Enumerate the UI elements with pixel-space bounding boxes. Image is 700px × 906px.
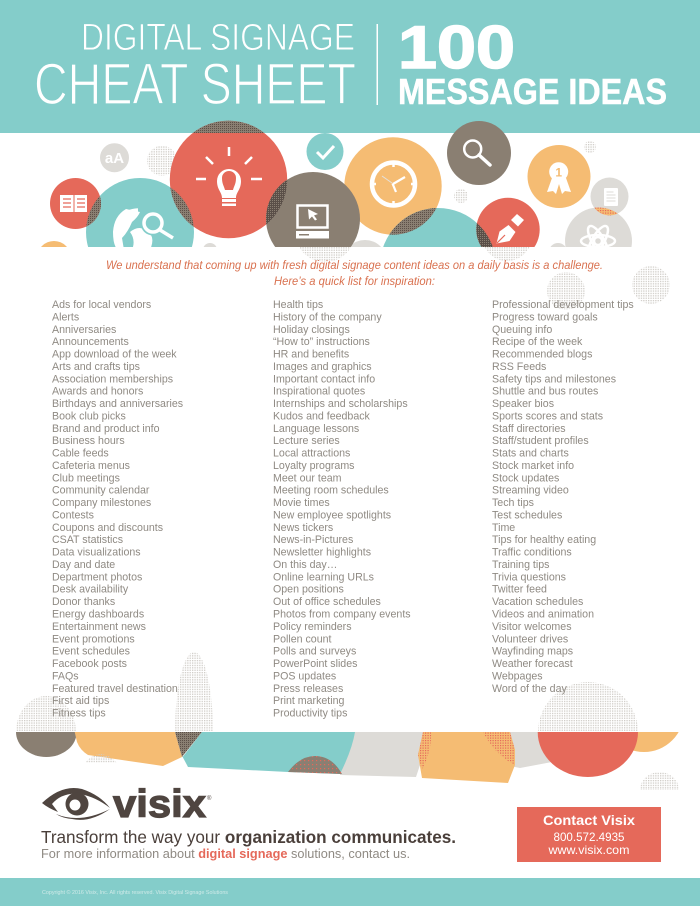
list: column 3: Traffic conditions: [492, 546, 572, 559]
shape: brown dotted wedge: [175, 732, 202, 757]
list: column 2: Meeting room schedules: [273, 484, 389, 497]
list: column 2: Internships and scholarships: [273, 398, 408, 410]
list: column 2: Polls and surveys: [273, 645, 357, 658]
circle: grey hump: [351, 240, 381, 247]
header band: [0, 0, 700, 133]
dotted background circles: [16, 142, 670, 731]
list: column 1: Company milestones: [52, 497, 152, 509]
icon: magnifier: [447, 121, 511, 185]
list: column 2: Health tips: [273, 299, 324, 311]
list: column 3: Recommended blogs: [492, 348, 593, 361]
list: column 2: Photos from company events: [273, 608, 411, 621]
list: column 3: Stats and charts: [492, 447, 569, 460]
list: column 1: FAQs: [52, 670, 79, 682]
list: column 2: Lecture series: [273, 435, 340, 447]
list: column 3: Weather forecast: [492, 658, 573, 670]
list: column 2: Movie times: [273, 497, 330, 509]
icon: letters aA: aA: [105, 150, 124, 167]
intro text: We understand that coming up with fresh digital signage content ideas on a daily basis is a challenge.: [106, 258, 603, 272]
shape: orange: [75, 732, 182, 766]
title divider: [376, 24, 378, 105]
list: column 1: Birthdays and anniversaries: [52, 398, 184, 410]
icon: atom: [565, 208, 632, 247]
list: column 1: Announcements: [52, 336, 129, 348]
list: column 1: Cafeteria menus: [52, 460, 130, 472]
list: column 1: Ads for local vendors: [52, 299, 152, 311]
icon: award ribbon: 1: [555, 166, 562, 180]
list: column 1: Cable feeds: [52, 447, 109, 460]
list: column 2: Local attractions: [273, 447, 351, 460]
circle: small grey: [204, 243, 216, 247]
list: column 2: Newsletter highlights: [273, 546, 372, 559]
list: column 3: Videos and animation: [492, 608, 594, 621]
list: column 1: Contests: [52, 509, 94, 522]
list: column 1: Event schedules: [52, 645, 130, 658]
list: column 1: Coupons and discounts: [52, 522, 164, 534]
shape: teal: [183, 732, 355, 774]
list: column 1: Facebook posts: [52, 658, 128, 670]
list: column 2: Out of office schedules: [273, 596, 381, 608]
list: column 3: Streaming video: [492, 484, 569, 497]
list: column 3: Vacation schedules: [492, 596, 584, 608]
list: column 2: Print marketing: [273, 695, 344, 707]
list: column 1: Book club picks: [52, 410, 126, 422]
list: column 3: Staff directories: [492, 423, 566, 435]
shape: orange centre: [418, 732, 515, 783]
icon: award ribbon: [528, 145, 590, 208]
list: column 2: Policy reminders: [273, 621, 352, 633]
icon: globe and magnifier: [86, 178, 194, 247]
hero circles: [41, 120, 632, 247]
circle: small orange: [41, 241, 67, 247]
list: column 2: News-in-Pictures: [273, 534, 354, 546]
list: column 1: Entertainment news: [52, 621, 146, 633]
list: column 3: Stock market info: [492, 460, 574, 472]
intro text: Here’s a quick list for inspiration:: [274, 274, 435, 288]
list: column 1: Department photos: [52, 571, 143, 583]
list: column 3: Recipe of the week: [492, 336, 583, 348]
list: column 3: Tech tips: [492, 497, 534, 509]
shape: small dotted hump right: [640, 772, 679, 790]
contact box: 800.572.4935: [554, 830, 625, 844]
list: column 2: Meet our team: [273, 472, 342, 484]
list: column 1: Desk availability: [52, 584, 129, 596]
shape: grey band: [340, 732, 552, 777]
list: column 2: POS updates: [273, 670, 337, 682]
list: column 2: Loyalty programs: [273, 460, 355, 472]
intro text: [106, 258, 603, 288]
list: column 3: Safety tips and milestones: [492, 373, 617, 385]
list: column 1: Anniversaries: [52, 324, 117, 336]
list: column 1: App download of the week: [52, 348, 177, 361]
icon: open book: [50, 178, 101, 229]
teal hump: [383, 208, 482, 247]
wordmark: visix: [113, 783, 206, 826]
shape: orange right half circle: [634, 732, 679, 752]
list: column 1: CSAT statistics: [52, 534, 124, 546]
list: column 2: HR and benefits: [273, 348, 350, 361]
list: column 2: News tickers: [273, 522, 334, 534]
title: 100 message ideas: [398, 14, 667, 112]
list: column 3: Test schedules: [492, 509, 563, 522]
list: column 2: History of the company: [273, 311, 382, 323]
list: column 1: Alerts: [52, 311, 80, 323]
list: column 2: Kudos and feedback: [273, 410, 370, 422]
list: column 3: Visitor welcomes: [492, 621, 572, 633]
tagline: Transform the way your organization communicates.: [41, 827, 456, 847]
shape: brown half circle: [16, 732, 77, 757]
list: column 3: Training tips: [492, 559, 550, 571]
list: column 1: Data visualizations: [52, 546, 141, 559]
icon: light bulb: [170, 121, 287, 238]
list: column 1: Fitness tips: [52, 707, 106, 720]
list: column 3: Sports scores and stats: [492, 410, 604, 422]
list: column 1: Community calendar: [52, 484, 150, 497]
icon: eye: [42, 788, 110, 820]
shape: small dotted hump: [85, 754, 117, 763]
sub-tagline: For more information about digital signage solutions, contact us.: [41, 846, 410, 861]
list: column 2: “How to” instructions: [273, 336, 370, 348]
list: column 3: Word of the day: [492, 683, 567, 695]
list: column 1: Awards and honors: [52, 385, 144, 398]
list: column 1: Association memberships: [52, 373, 174, 385]
list: column 2: Online learning URLs: [273, 571, 375, 583]
list: column 1: Featured travel destination: [52, 683, 178, 695]
copyright: Copyright © 2016 Visix, Inc. All rights reserved. Visix Digital Signage Solutions: [42, 889, 228, 896]
shape: red dots left: [418, 732, 431, 770]
shape: red dots right: [483, 732, 515, 765]
list: column 1: Energy dashboards: [52, 608, 145, 621]
list: column 2: New employee spotlights: [273, 509, 392, 522]
title: 100 message ideas: MESSAGE IDEAS: [398, 71, 667, 112]
list: column 3: Queuing info: [492, 324, 552, 336]
icon: checkmark: [306, 133, 344, 170]
list: column 1: Club meetings: [52, 472, 120, 484]
list: column 2: Press releases: [273, 683, 344, 695]
list: column 3: Staff/student profiles: [492, 435, 589, 447]
list: column 1: First aid tips: [52, 695, 110, 707]
footer band: [0, 878, 700, 906]
list: column 2: Pollen count: [273, 633, 331, 645]
list: column 3: Speaker bios: [492, 398, 555, 410]
shape: dark dotted hump: [288, 756, 342, 774]
circle: small grey right: [550, 243, 566, 247]
list: column 3: Wayfinding maps: [492, 645, 574, 658]
list: column 2: Holiday closings: [273, 324, 350, 336]
list: column 3: Webpages: [492, 670, 543, 682]
list: column 3: RSS Feeds: [492, 361, 547, 373]
contact box: www.visix.com: [547, 843, 630, 857]
list: column 3: Time: [492, 522, 515, 534]
contact box: Contact Visix: [543, 812, 635, 828]
title: digital signage cheat sheet: DIGITAL SIGNAGE: [81, 17, 355, 59]
list: column 2: Inspirational quotes: [273, 385, 366, 398]
title: digital signage cheat sheet: [34, 17, 356, 117]
title: 100 message ideas: 100: [398, 14, 515, 81]
list: column 3: Twitter feed: [492, 584, 547, 596]
list: column 3: Shuttle and bus routes: [492, 385, 599, 398]
list: column 2: Open positions: [273, 584, 344, 596]
list: column 1: Event promotions: [52, 633, 135, 645]
contact box: [517, 807, 661, 862]
icon: clock: [344, 137, 442, 235]
list: column 3: Trivia questions: [492, 571, 567, 583]
list: column 1: Brand and product info: [52, 423, 159, 435]
title: digital signage cheat sheet: CHEAT SHEET: [34, 52, 356, 117]
list: column 2: Images and graphics: [273, 361, 372, 373]
list: column 2: Important contact info: [273, 373, 375, 385]
icon: fountain pen: [476, 198, 540, 247]
list: column 1: Business hours: [52, 435, 125, 447]
logo: visix: ®: [207, 795, 212, 802]
bottom decorative band: [16, 732, 679, 790]
list: column 1: Day and date: [52, 559, 115, 571]
list: column 2: Language lessons: [273, 423, 360, 435]
list: column 3: Volunteer drives: [492, 633, 569, 645]
list: column 3: Stock updates: [492, 472, 560, 484]
list: column 2: PowerPoint slides: [273, 658, 358, 670]
icon: computer: [266, 172, 360, 247]
list: column 3: Professional development tips: [492, 299, 634, 311]
list: column 2: Productivity tips: [273, 707, 348, 720]
list: column 1: Arts and crafts tips: [52, 361, 141, 373]
icon: letters aA: [100, 143, 129, 172]
list: column 1: Donor thanks: [52, 596, 116, 608]
list: column 2: On this day…: [273, 559, 337, 571]
icon: document: [590, 178, 628, 216]
list: column 3: Tips for healthy eating: [492, 534, 596, 546]
shape: red half circle: [538, 732, 638, 777]
logo: visix: [42, 783, 212, 826]
list: column 3: Progress toward goals: [492, 311, 598, 323]
